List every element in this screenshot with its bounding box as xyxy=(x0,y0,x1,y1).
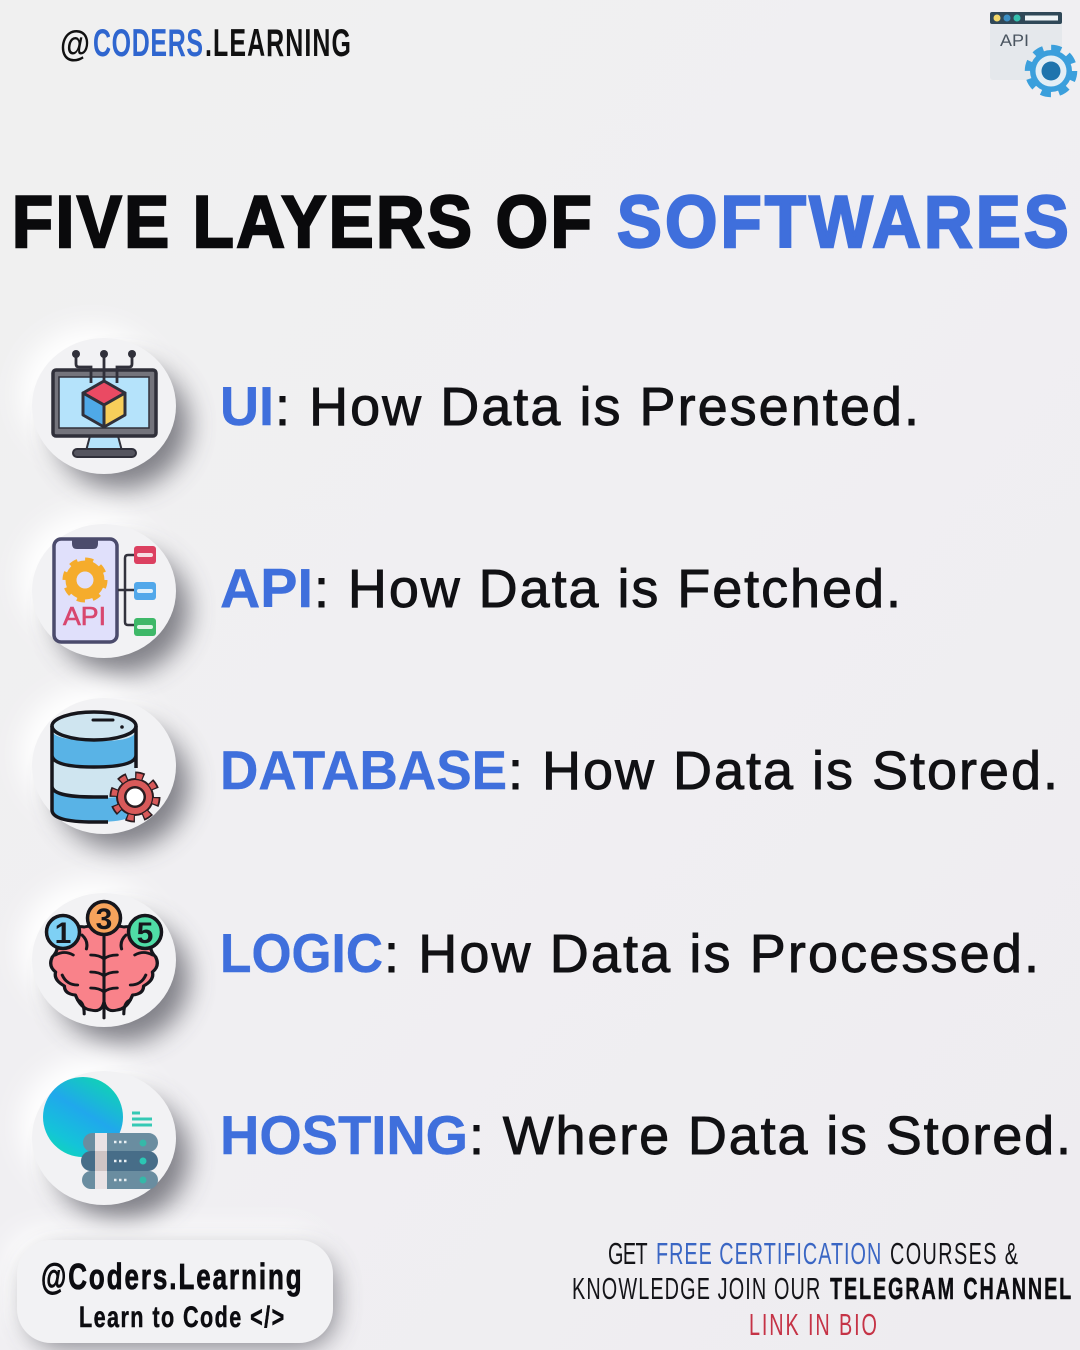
icon badge: UI monitor xyxy=(20,326,189,489)
text: UI: : How Data is Presented. xyxy=(275,377,919,437)
icon badge: database xyxy=(20,686,189,849)
footer badge xyxy=(7,1230,335,1347)
text: Hosting: HOSTING xyxy=(220,1104,468,1166)
text: Database xyxy=(220,739,1058,801)
title xyxy=(12,181,1069,263)
text: Database: : How Data is Stored. xyxy=(508,741,1058,801)
header handle: CODERS xyxy=(93,20,203,64)
footer badge: @Coders.Learning xyxy=(41,1257,302,1297)
row: Hosting layer xyxy=(20,1058,1071,1221)
icon badge: brain xyxy=(20,880,189,1043)
header handle xyxy=(60,20,351,64)
icon badge: brain: 3 xyxy=(96,903,112,936)
icon badge: API phone xyxy=(20,511,189,674)
text: Database: DATABASE xyxy=(220,739,507,801)
footer call to action: TELEGRAM CHANNEL xyxy=(830,1270,1071,1306)
row: API layer xyxy=(20,511,901,674)
title: FIVE LAYERS OF xyxy=(12,181,592,263)
footer call to action: GET xyxy=(608,1235,648,1271)
icon: API window with gear xyxy=(990,12,1074,94)
footer call to action: LINK IN BIO xyxy=(749,1306,877,1342)
row: UI layer xyxy=(20,326,919,489)
icon badge: globe and servers xyxy=(20,1058,189,1221)
text: Logic: LOGIC xyxy=(220,922,383,984)
row: Logic layer xyxy=(20,880,1039,1043)
footer call to action: KNOWLEDGE JOIN OUR xyxy=(572,1270,820,1306)
icon badge: API phone: API xyxy=(63,603,106,631)
header handle: @ xyxy=(60,23,90,64)
icon badge: brain: 1 xyxy=(55,917,71,950)
icon: API window with gear: API xyxy=(1000,31,1029,50)
text: UI: UI xyxy=(220,375,274,437)
text: Hosting: : Where Data is Stored. xyxy=(469,1106,1071,1166)
row: Database layer xyxy=(20,686,1058,849)
icon badge: brain: 5 xyxy=(137,917,153,950)
footer badge: Learn to Code </> xyxy=(79,1299,284,1334)
title: SOFTWARES xyxy=(617,181,1069,263)
header handle: .LEARNING xyxy=(205,20,351,64)
text: Hosting xyxy=(220,1104,1071,1166)
footer call to action: COURSES & xyxy=(890,1235,1018,1271)
footer call to action: FREE CERTIFICATION xyxy=(656,1235,881,1271)
footer call to action xyxy=(572,1235,1071,1342)
text: API: API xyxy=(220,557,313,619)
text: Logic: : How Data is Processed. xyxy=(384,924,1039,984)
text: API: : How Data is Fetched. xyxy=(314,559,901,619)
